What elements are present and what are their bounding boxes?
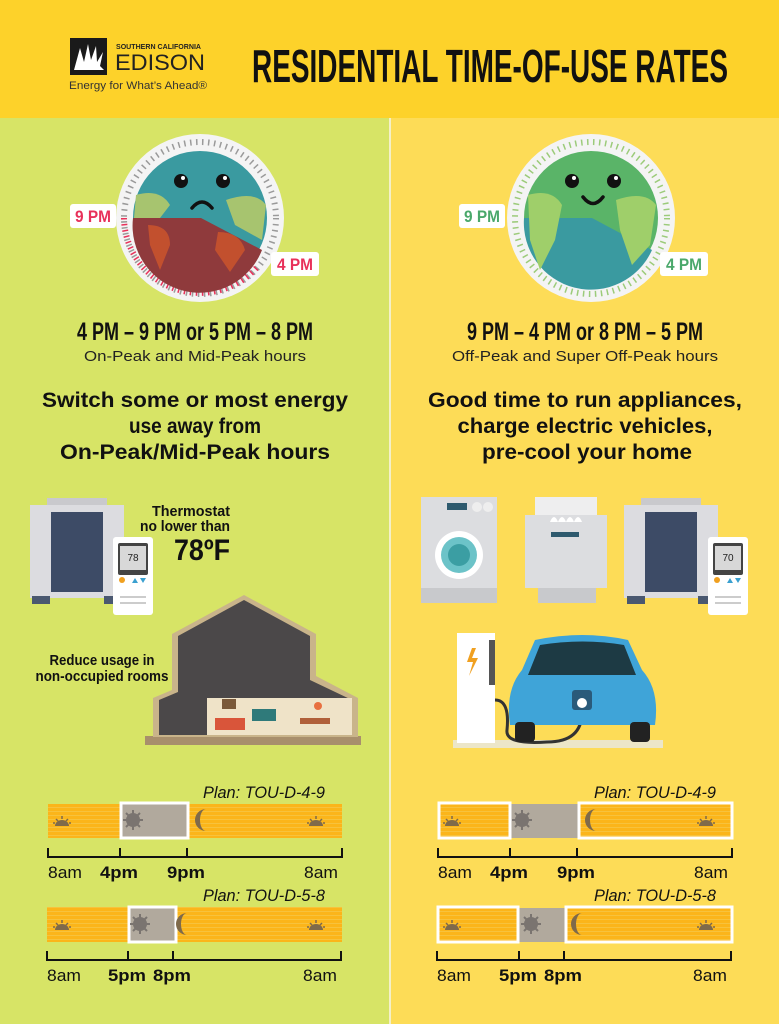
timeline: right TOU-D-4-9 — [438, 783, 732, 882]
note: reduce usage: Reduce usage in — [50, 652, 154, 669]
icon: dishwasher — [525, 497, 607, 603]
timeline: right TOU-D-5-8: 8am — [437, 966, 471, 985]
icon: AC unit with remote (right): 70 — [722, 553, 734, 564]
left heading hours: On-Peak and Mid-Peak hours — [84, 348, 306, 365]
logo: Southern California Edison — [69, 38, 207, 92]
clock left: sad earth — [70, 134, 319, 302]
timeline: left TOU-D-4-9: 8am — [48, 863, 82, 882]
icon: house — [145, 595, 361, 745]
timeline: left TOU-D-5-8 — [47, 886, 342, 985]
timeline: right TOU-D-5-8: 8pm — [544, 966, 582, 985]
icon: washer — [421, 497, 497, 603]
clock right: happy earth: 4 PM — [666, 255, 702, 274]
logo: Southern California Edison: Energy for What’s Ahead® — [69, 80, 207, 92]
left heading hours: 4 PM – 9 PM or 5 PM – 8 PM — [77, 318, 313, 346]
timeline: left TOU-D-4-9: 4pm — [100, 863, 138, 882]
timeline: left TOU-D-5-8: 8am — [303, 966, 337, 985]
left advice text — [42, 389, 348, 464]
timeline: right TOU-D-5-8: 8am — [693, 966, 727, 985]
timeline: left TOU-D-4-9 — [48, 783, 342, 882]
icon: EV charger and car — [453, 633, 663, 748]
left advice text: use away from — [129, 415, 261, 438]
left advice text: Switch some or most energy — [42, 389, 348, 412]
icon: AC unit with remote (right) — [624, 498, 748, 615]
thermostat note — [140, 503, 230, 567]
logo: Southern California Edison: EDISON — [115, 50, 205, 75]
timeline: right TOU-D-4-9: 8am — [438, 863, 472, 882]
timeline: right TOU-D-4-9: 8am — [694, 863, 728, 882]
timeline: left TOU-D-4-9: 8am — [304, 863, 338, 882]
timeline: left TOU-D-4-9: Plan: TOU-D-4-9 — [203, 783, 326, 802]
right advice text — [428, 389, 742, 464]
left heading hours — [77, 318, 313, 365]
icon: AC unit with remote (left): 78 — [127, 553, 139, 564]
clock right: happy earth — [459, 134, 708, 302]
timeline: left TOU-D-5-8: Plan: TOU-D-5-8 — [203, 886, 326, 905]
timeline: right TOU-D-5-8: 5pm — [499, 966, 537, 985]
right advice text: charge electric vehicles, — [458, 415, 712, 438]
note: reduce usage: non-occupied rooms — [36, 668, 168, 685]
thermostat note: 78ºF — [174, 534, 230, 567]
timeline: right TOU-D-4-9: Plan: TOU-D-4-9 — [594, 783, 717, 802]
clock left: sad earth: 9 PM — [75, 207, 111, 226]
logo: Southern California Edison: SOUTHERN CALIFORNIA — [116, 44, 201, 51]
timeline: right TOU-D-4-9: 4pm — [490, 863, 528, 882]
icon: AC unit with remote (left) — [30, 498, 153, 615]
right advice text: pre-cool your home — [482, 441, 692, 464]
timeline: right TOU-D-5-8: Plan: TOU-D-5-8 — [594, 886, 717, 905]
timeline: left TOU-D-5-8: 8pm — [153, 966, 191, 985]
timeline: left TOU-D-5-8: 5pm — [108, 966, 146, 985]
timeline: left TOU-D-5-8: 8am — [47, 966, 81, 985]
right heading hours: Off-Peak and Super Off-Peak hours — [452, 348, 718, 365]
clock right: happy earth: 9 PM — [464, 207, 500, 226]
timeline: left TOU-D-4-9: 9pm — [167, 863, 205, 882]
timeline: right TOU-D-4-9: 9pm — [557, 863, 595, 882]
thermostat note: Thermostat — [152, 503, 230, 520]
right advice text: Good time to run appliances, — [428, 389, 742, 412]
thermostat note: no lower than — [140, 518, 230, 535]
right heading hours — [452, 318, 718, 365]
note: reduce usage — [36, 652, 168, 685]
timeline: right TOU-D-5-8 — [437, 886, 732, 985]
left advice text: On-Peak/Mid-Peak hours — [60, 441, 330, 464]
clock left: sad earth: 4 PM — [277, 255, 313, 274]
